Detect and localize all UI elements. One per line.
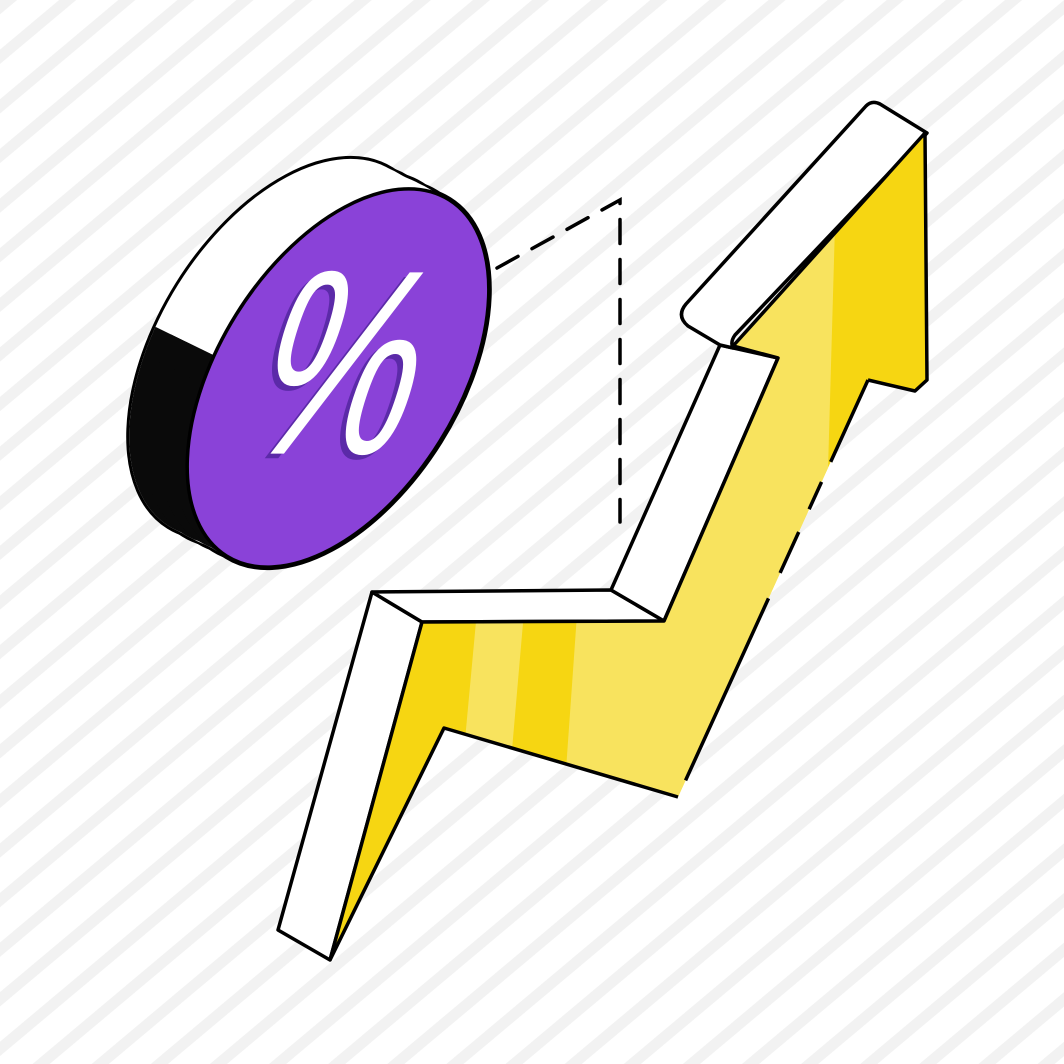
arrow side: riser — [611, 345, 778, 621]
arrow — [278, 102, 927, 960]
coin — [126, 156, 492, 570]
percent sign: % — [220, 216, 474, 510]
arrow side: top strip — [372, 590, 664, 622]
percent sign: % — [214, 221, 468, 515]
arrow side: left — [278, 592, 422, 960]
coin face — [125, 136, 551, 620]
dashed guide line — [497, 200, 620, 522]
arrow front face — [330, 133, 927, 960]
arrow head top — [681, 102, 927, 348]
